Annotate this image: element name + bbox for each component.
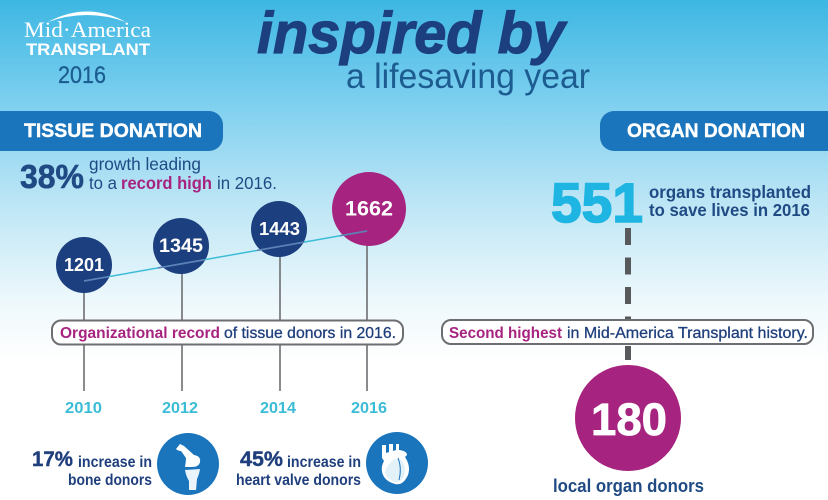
- circle: 2016 value: 1662: [345, 198, 393, 220]
- callout: organizational record: Organizational record: [60, 325, 220, 342]
- stat: heart valve donors: [236, 448, 361, 489]
- text block: 38% growth: 38%: [20, 158, 84, 195]
- text block: 38% growth: record high: [121, 173, 212, 193]
- callout: organizational record: [52, 320, 403, 344]
- callout: second highest: in Mid-America Transplant history.: [567, 325, 808, 342]
- text block: 38% growth: [20, 154, 277, 195]
- year labels: 2016: [351, 400, 387, 417]
- year labels: [65, 400, 387, 417]
- circle: 2010 value: [56, 237, 112, 293]
- panel: organ donation: [442, 111, 828, 496]
- logo: Mid-America Transplant 2016: TRANSPLANT: [26, 40, 151, 59]
- title: [257, 1, 590, 96]
- label: local organ donors: local organ donors: [553, 476, 704, 496]
- stat: 551 organs: 551: [551, 171, 643, 234]
- icon: knee bone: [157, 433, 219, 495]
- logo: Mid-America Transplant 2016: 2016: [58, 62, 106, 89]
- text block: 38% growth: in 2016.: [217, 173, 277, 193]
- circle: 2014 value: 1443: [259, 218, 300, 239]
- circle: 2012 value: [153, 218, 209, 274]
- text block: 38% growth: to a: [89, 173, 117, 193]
- callout: second highest: Second highest: [449, 325, 563, 342]
- stat: heart valve donors: 45%: [240, 448, 283, 471]
- stat: 551 organs: to save lives in 2016: [649, 200, 810, 220]
- heading: organ donation: [600, 111, 828, 151]
- circle: 2012 value: 1345: [159, 236, 203, 257]
- stat: bone donors: 17%: [32, 448, 73, 471]
- logo: Mid-America Transplant 2016: [24, 12, 151, 89]
- stat: 551 organs: [551, 171, 811, 234]
- circle: 2010 value: 1201: [64, 255, 104, 275]
- callout: second highest: [442, 320, 813, 344]
- circle: 180 local donors: 180: [591, 394, 667, 445]
- panel: tissue donation: [0, 111, 428, 495]
- circle: 2016 value: [332, 172, 406, 246]
- heading: organ donation: ORGAN DONATION: [627, 121, 805, 142]
- trend line: [84, 231, 367, 281]
- stat: bone donors: bone donors: [68, 472, 152, 489]
- chart: tissue donors by year: [52, 172, 406, 417]
- title: inspired by: [257, 1, 568, 66]
- stat: bone donors: increase in: [78, 454, 152, 471]
- callout: organizational record: of tissue donors in 2016.: [224, 325, 396, 342]
- title: a lifesaving year: [346, 57, 590, 96]
- stat: heart valve donors: increase in: [287, 454, 361, 471]
- circle: 180 local donors: [575, 365, 681, 471]
- stat: heart valve donors: heart valve donors: [236, 472, 361, 489]
- dashed connector: [625, 228, 631, 360]
- circle: 2014 value: [251, 201, 307, 257]
- heading: tissue donation: TISSUE DONATION: [24, 121, 202, 142]
- heading: tissue donation: [0, 111, 223, 151]
- year labels: 2012: [162, 400, 198, 417]
- text block: 38% growth: growth leading: [89, 154, 201, 174]
- year labels: 2014: [260, 400, 296, 417]
- stat: bone donors: [32, 448, 152, 489]
- year labels: 2010: [65, 400, 102, 417]
- icon: heart: [366, 432, 428, 494]
- logo: Mid-America Transplant 2016: Mid·America: [24, 17, 151, 42]
- stat: 551 organs: organs transplanted: [649, 182, 811, 202]
